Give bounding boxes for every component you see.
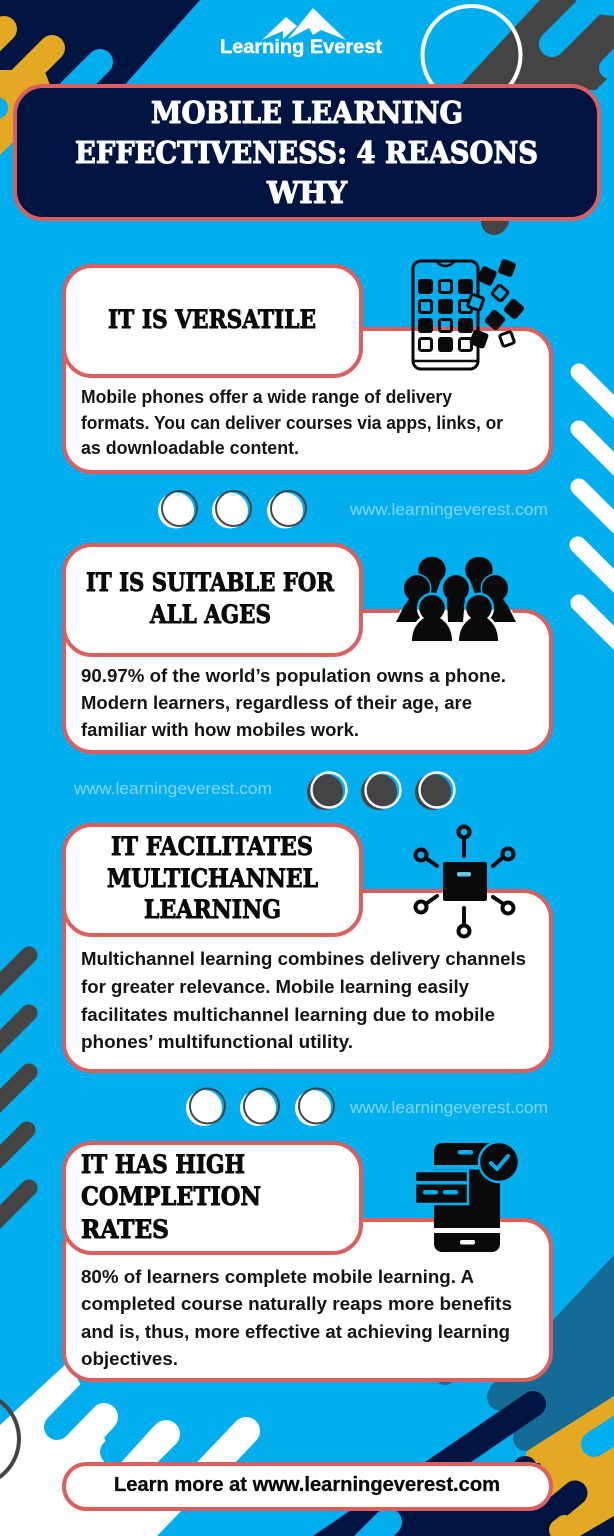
heading: ALL AGES: [149, 600, 271, 629]
heading: RATES: [81, 1215, 169, 1244]
body text: facilitates multichannel learning due to mobile: [81, 1004, 495, 1025]
title panel: [15, 86, 599, 219]
decoration: bottom right stripes: [313, 1255, 614, 1536]
heading: MULTICHANNEL: [107, 864, 318, 893]
header card: [64, 825, 361, 935]
icon: phone with card and check: [415, 1142, 519, 1252]
decoration: left dark diagonal bars: [0, 955, 29, 1237]
heading: COMPLETION: [81, 1182, 261, 1211]
body text: phones’ multifunctional utility.: [81, 1031, 353, 1052]
header card: [64, 1143, 361, 1253]
header card: [64, 545, 361, 655]
heading: LEARNING: [144, 895, 281, 924]
heading: [86, 568, 334, 629]
body card: [64, 891, 551, 1071]
logo wordmark: Learning Everest: [220, 37, 383, 58]
header card: [64, 266, 361, 376]
website label three: www.learningeverest.com: [349, 1099, 548, 1117]
decoration: bottom left white stripes: [0, 1362, 246, 1536]
decoration: right white diagonal bars: [578, 372, 614, 649]
body card: [64, 611, 551, 752]
body text: for greater relevance. Mobile learning easily: [81, 976, 470, 997]
footer text: Learn more at www.learningeverest.com: [114, 1474, 500, 1496]
body card: [64, 329, 551, 472]
body text: 80% of learners complete mobile learning. A: [81, 1266, 474, 1287]
body text: Mobile phones offer a wide range of delivery: [81, 386, 453, 407]
title text: MOBILE LEARNING: [151, 96, 463, 131]
title text: EFFECTIVENESS: 4 REASONS: [75, 136, 538, 171]
decoration: dark dots row two: [307, 772, 454, 810]
panel: multichannel learning: [64, 825, 551, 1071]
panel: it is versatile: [64, 258, 551, 472]
logo mountains: [262, 8, 346, 40]
body text: 90.97% of the world’s population owns a phone.: [81, 665, 506, 686]
decoration: white dots row three: [186, 1088, 334, 1126]
logo: Learning Everest: [220, 8, 383, 58]
body text: [81, 665, 506, 740]
body text: Multichannel learning combines delivery channels: [81, 948, 526, 969]
body text: [81, 386, 503, 458]
panel: suitable for all ages: [64, 545, 551, 752]
body text: [81, 1266, 512, 1369]
icon: group of people: [396, 557, 516, 641]
decoration: top right stripes and ring: [422, 0, 614, 222]
body text: and is, thus, more effective at achieving learning: [81, 1321, 510, 1342]
icon: network hub box: [416, 826, 514, 936]
decoration: top left stripes: [0, 0, 200, 155]
website label two: www.learningeverest.com: [73, 780, 272, 798]
heading: IT HAS HIGH: [81, 1150, 245, 1179]
title text: WHY: [266, 176, 348, 211]
body card: [64, 1220, 551, 1380]
body text: completed course naturally reaps more benefits: [81, 1293, 512, 1314]
heading: IT IS VERSATILE: [108, 305, 316, 334]
decoration: white dots row one: [158, 491, 306, 528]
body text: Modern learners, regardless of their age, are: [81, 692, 472, 713]
footer call to action: [64, 1464, 551, 1509]
website label one: www.learningeverest.com: [349, 501, 548, 519]
heading: IT IS SUITABLE FOR: [86, 568, 334, 597]
body text: objectives.: [81, 1348, 178, 1369]
heading: IT FACILITATES: [111, 832, 313, 861]
body text: as downloadable content.: [81, 437, 299, 458]
body text: formats. You can deliver courses via apps, links, or: [81, 412, 503, 433]
body text: [81, 948, 526, 1052]
icon: phone with app tiles: [413, 258, 525, 369]
title text: [75, 96, 538, 211]
body text: familiar with how mobiles work.: [81, 719, 359, 740]
panel: high completion rates: [64, 1142, 551, 1380]
heading: [107, 832, 318, 924]
heading: [81, 1150, 261, 1244]
